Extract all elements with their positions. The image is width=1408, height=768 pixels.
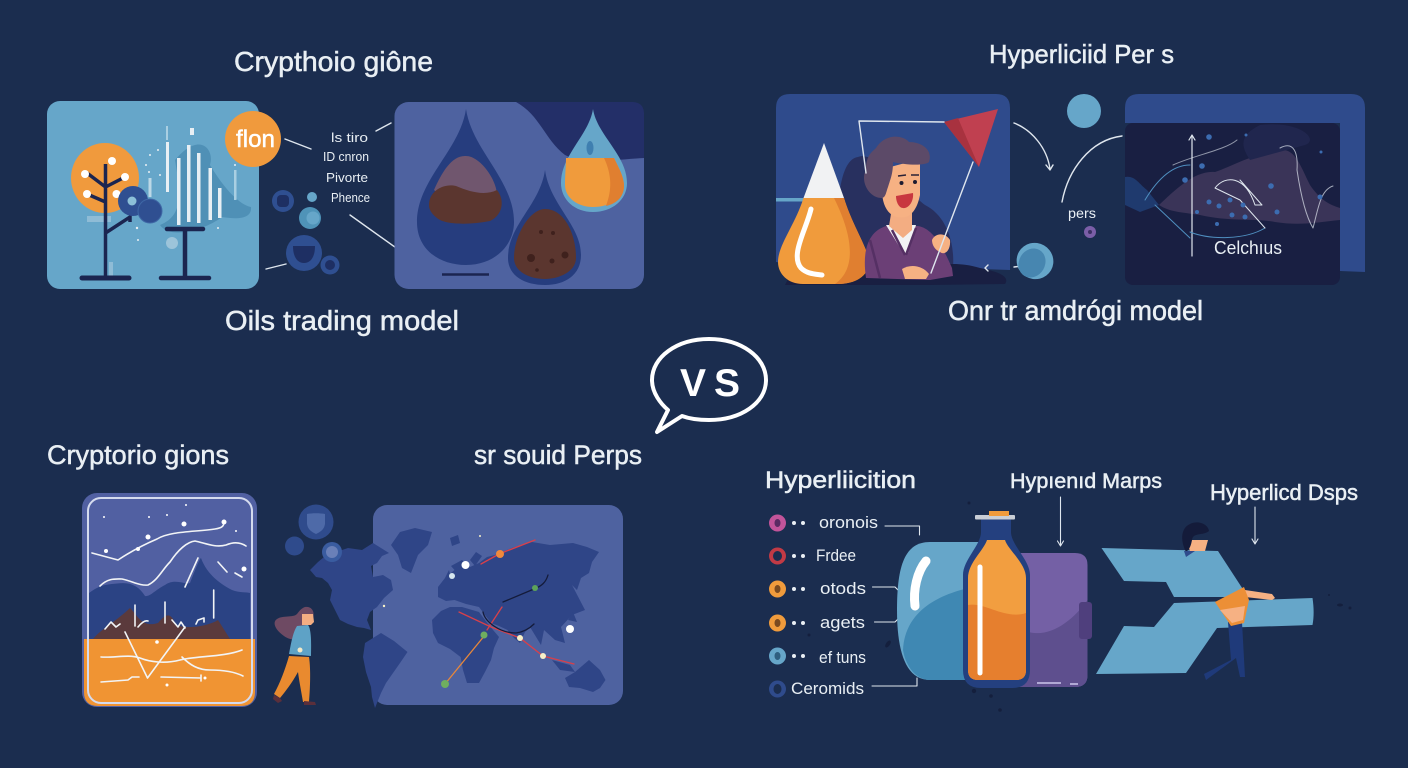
- list: legend items: oronois: [819, 513, 878, 532]
- chart lines: [92, 522, 246, 682]
- heading: Hyperliicition: Hyperliicition: [765, 467, 916, 494]
- label: Celchius: Celchıus: [1214, 238, 1282, 258]
- list: legend items: ef tuns: [819, 648, 866, 667]
- section: top right hyperliquid: [776, 39, 1365, 326]
- decorative bar: [776, 198, 806, 202]
- arrow: curved connectors: [985, 123, 1122, 271]
- data dots: [1182, 134, 1322, 226]
- icon: blue arrow shape: [1096, 548, 1314, 674]
- panel: oil drops: [394, 102, 644, 289]
- route lines: [445, 540, 574, 684]
- chart lines: [1145, 135, 1333, 256]
- decorative specks: [808, 502, 1352, 712]
- icon: medium drop: [508, 170, 581, 285]
- labels: middle list: ID cnron: [323, 149, 369, 164]
- heading: Hyperliciid Per s: Hyperliciid Per s: [989, 39, 1174, 69]
- heading: Hypıenıd Marps: Hypıenıd Marps: [1010, 470, 1162, 493]
- connector lines: [266, 123, 406, 269]
- illustration: large bottle group: [897, 511, 1092, 688]
- icon: blue blob: [1010, 236, 1060, 286]
- icon: orange flask: [778, 143, 869, 284]
- data dots: [103, 504, 246, 686]
- panel: tree and bars: [47, 101, 281, 289]
- heading: Crypthoio giône: Crypthoio giône: [234, 46, 433, 77]
- section: bottom right hyperliquid: [765, 467, 1358, 712]
- badge: flon: [225, 111, 281, 167]
- badge: flon: flon: [236, 126, 275, 153]
- illustration: person holding shape: [1182, 522, 1275, 680]
- heading: sr souid Perps: sr souid Perps: [474, 440, 642, 470]
- map continents: [310, 528, 606, 708]
- illustration: walking woman: [273, 607, 316, 705]
- decorative line under drop: [442, 273, 489, 276]
- icon: purple dot: [1084, 226, 1096, 238]
- panel: person with flask and kite: [776, 94, 1010, 285]
- panel: dark chart screen: [1125, 94, 1365, 285]
- labels: middle list: Pivorte: [326, 170, 368, 185]
- labels: middle list: Phence: [331, 190, 370, 205]
- heading: Oils trading model: Oils trading model: [225, 305, 459, 336]
- icon: blue canister: [897, 542, 985, 680]
- labels: middle list: [323, 130, 370, 205]
- section: top left crypto oil: [47, 46, 644, 336]
- heading: Hyperlicd Dsps: Hyperlicd Dsps: [1210, 480, 1358, 505]
- icon: orange drop: [561, 109, 627, 212]
- illustration: person: [864, 137, 953, 280]
- list: legend items: Frdee: [816, 546, 856, 565]
- panel: world map: [310, 505, 623, 708]
- list: legend items: otods: [820, 579, 866, 598]
- icon: purple canister: [1015, 553, 1092, 687]
- icon: table stand: [161, 229, 209, 278]
- list: legend items: [769, 513, 878, 698]
- speech bubble: VS: [652, 339, 766, 432]
- arrows: down pointers: [1058, 497, 1258, 546]
- labels: middle list: ls tiro: [331, 130, 368, 145]
- heading: Cryptorio gions: Cryptorio gions: [47, 440, 229, 470]
- icon: blue circle: [1067, 94, 1101, 128]
- list: legend items: agets: [820, 613, 865, 632]
- section: bottom left comparison: [47, 440, 642, 708]
- icons: blue bubbles: [272, 190, 340, 274]
- heading: Onr tr amdrógi model: Onr tr amdrógi model: [948, 295, 1203, 326]
- icons: shield bubbles: [285, 504, 342, 562]
- speech bubble: VS: VS: [680, 362, 740, 405]
- icon: orange bottle: [963, 511, 1030, 688]
- icon: blue coins: [118, 186, 162, 223]
- chart: white bars: [136, 126, 236, 241]
- panel: price chart card: [82, 493, 257, 707]
- map markers: [383, 535, 574, 688]
- connector lines: [872, 526, 920, 686]
- icon: large drop: [417, 109, 514, 265]
- icon: red kite: [859, 109, 998, 273]
- list: legend items: Ceromids: [791, 679, 864, 698]
- icon: orange circle tree: [71, 143, 139, 278]
- label: pers: pers: [1068, 205, 1096, 221]
